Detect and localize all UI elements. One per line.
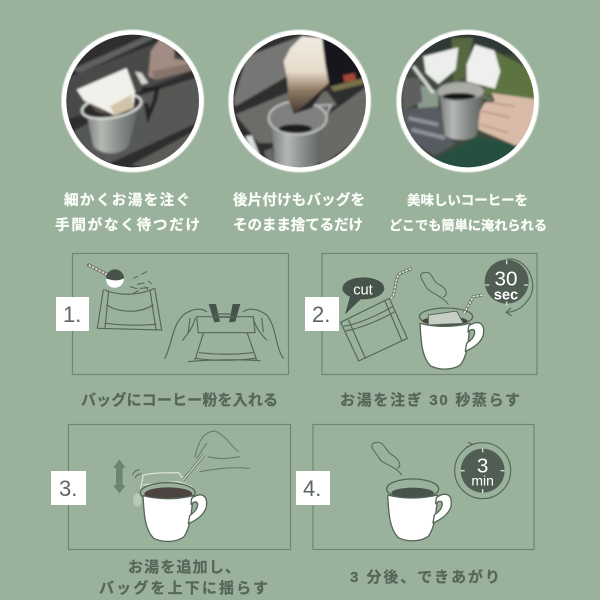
- caption: photo 2: [233, 191, 365, 234]
- timer: 30 sec: [485, 259, 533, 316]
- illustration: cut label and bag: cut: [353, 282, 373, 298]
- caption: step 3: [99, 558, 268, 597]
- timer: 3 min: 3: [477, 454, 488, 477]
- number badge 4: [296, 471, 330, 505]
- timer: 3 min: [455, 442, 511, 499]
- caption: step 3: お湯を追加し、: [128, 558, 240, 576]
- caption: photo 3: [389, 192, 547, 233]
- caption: photo 1: 細かくお湯を注ぐ: [64, 191, 190, 209]
- panel: step 2: [305, 254, 537, 374]
- number badge 4: 4.: [303, 476, 321, 501]
- number badge 3: [51, 471, 86, 505]
- timer: 3 min: min: [471, 473, 494, 489]
- caption: photo 3: どこでも簡単に淹れられる: [389, 217, 547, 233]
- caption: photo 2: 後片付けもバッグを: [233, 191, 365, 209]
- number badge 2: [305, 297, 339, 331]
- illustration: hands opening bag: [165, 304, 283, 362]
- illustration: mug with bag and hand: [133, 431, 249, 541]
- caption: photo 1: 手間がなく待つだけ: [55, 216, 200, 234]
- caption: photo 3: 美味しいコーヒーを: [407, 192, 528, 208]
- timer: 30 sec: sec: [494, 288, 518, 304]
- illustration: scoop pouring coffee into bag: [89, 265, 162, 330]
- photo 3: hand holding cup of coffee outdoors: [396, 30, 539, 172]
- caption: step 3: バッグを上下に揺らす: [99, 579, 268, 597]
- caption: step 1: バッグにコーヒー粉を入れる: [81, 391, 278, 409]
- caption: photo 1: [55, 191, 200, 234]
- timer: 30 sec: 30: [495, 268, 517, 291]
- caption: step 4: 3 分後、できあがり: [350, 568, 500, 586]
- number badge 3: 3.: [59, 476, 77, 501]
- panel: step 3: [51, 424, 290, 550]
- illustration: mug with bag: [419, 295, 484, 369]
- illustration: up-down arrow: [113, 459, 141, 493]
- panel: step 1: [56, 254, 288, 374]
- photo 2: lifting the used bag from the cup: [228, 30, 371, 172]
- illustration: finished mug with steam: [372, 442, 451, 541]
- panel: step 4: [296, 424, 534, 550]
- caption: step 2: お湯を注ぎ 30 秒蒸らす: [340, 391, 520, 409]
- number badge 1: [56, 297, 89, 331]
- caption: photo 2: そのまま捨てるだけ: [233, 216, 363, 234]
- number badge 1: 1.: [63, 302, 81, 327]
- photo 1: bag hooked on steel cup: [61, 30, 204, 172]
- number badge 2: 2.: [312, 302, 330, 327]
- illustration: cut label and bag: [341, 268, 448, 361]
